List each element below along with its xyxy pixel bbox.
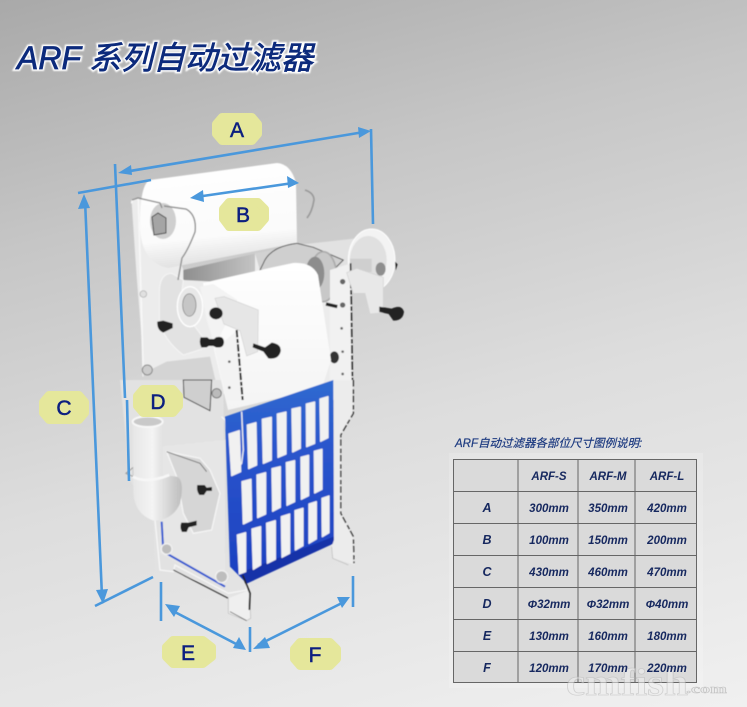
dimension table: ARF-M: [588, 471, 627, 483]
dimension table: D: [482, 597, 492, 611]
label: F: F: [309, 644, 321, 667]
dimension table: 460mm: [587, 567, 628, 579]
dimension table: 300mm: [529, 503, 569, 515]
dimension arrows: [78, 127, 373, 652]
lower acrylic housing: [120, 380, 251, 621]
blue filter panel: [225, 380, 355, 610]
right shaft and hand wheel: [260, 229, 398, 302]
dimension table: 100mm: [529, 535, 569, 547]
dimension table: Φ32mm: [528, 599, 570, 611]
dimension table: F: [483, 661, 491, 675]
watermark: .com: [686, 681, 727, 696]
title: 系列自动过滤器: [89, 40, 316, 76]
label: E: E: [181, 642, 195, 665]
back plate: [132, 199, 350, 400]
dimension table: ARF-S: [530, 471, 567, 483]
label: A: A: [230, 119, 244, 142]
dimension table: A: [481, 501, 492, 515]
pipe elbow: [126, 467, 133, 477]
label: F: [294, 642, 337, 667]
dimension table: ARF-L: [649, 471, 684, 483]
dimension table: B: [482, 533, 492, 547]
black knobs lower: [197, 485, 212, 495]
title: 系列自动过滤器: [89, 40, 316, 76]
label: C: [43, 395, 85, 420]
right upright plate: [326, 263, 353, 400]
dimension table: 200mm: [646, 535, 687, 547]
dimension table: Φ32mm: [587, 599, 629, 611]
dimension table: E: [483, 629, 492, 643]
label: D: [137, 389, 179, 414]
watermark: [566, 662, 727, 704]
title: ARF: [15, 40, 83, 76]
label: D: D: [150, 391, 166, 414]
filter machine illustration: [120, 163, 404, 621]
front clamp and knobs: [157, 268, 404, 400]
front paper sheet: [203, 263, 331, 410]
dimension table: 120mm: [529, 663, 569, 675]
dimension table: 170mm: [588, 663, 628, 675]
dimension table: 350mm: [588, 503, 628, 515]
dimension table: 160mm: [588, 631, 628, 643]
label: B: [223, 202, 265, 227]
dimension table: Φ40mm: [646, 599, 688, 611]
dimension table: 220mm: [646, 663, 687, 675]
table heading: ARF自动过滤器各部位尺寸图例说明:: [454, 437, 642, 450]
dimension table: 420mm: [646, 503, 687, 515]
dimension table: 430mm: [528, 567, 569, 579]
dimension table: 180mm: [647, 631, 687, 643]
dimension table: C: [482, 565, 492, 579]
label: B: B: [236, 204, 250, 227]
watermark: cmfish: [566, 662, 688, 704]
label: C: C: [56, 397, 72, 420]
paper roll, top: [132, 163, 314, 280]
dimension table: 130mm: [529, 631, 569, 643]
dimension table: 470mm: [646, 567, 687, 579]
label: E: [166, 640, 212, 665]
title: ARF: [15, 40, 83, 76]
label: A: [216, 117, 258, 142]
dimension table: 150mm: [588, 535, 628, 547]
dimension table: [449, 453, 727, 704]
right lower plate: [332, 380, 355, 565]
